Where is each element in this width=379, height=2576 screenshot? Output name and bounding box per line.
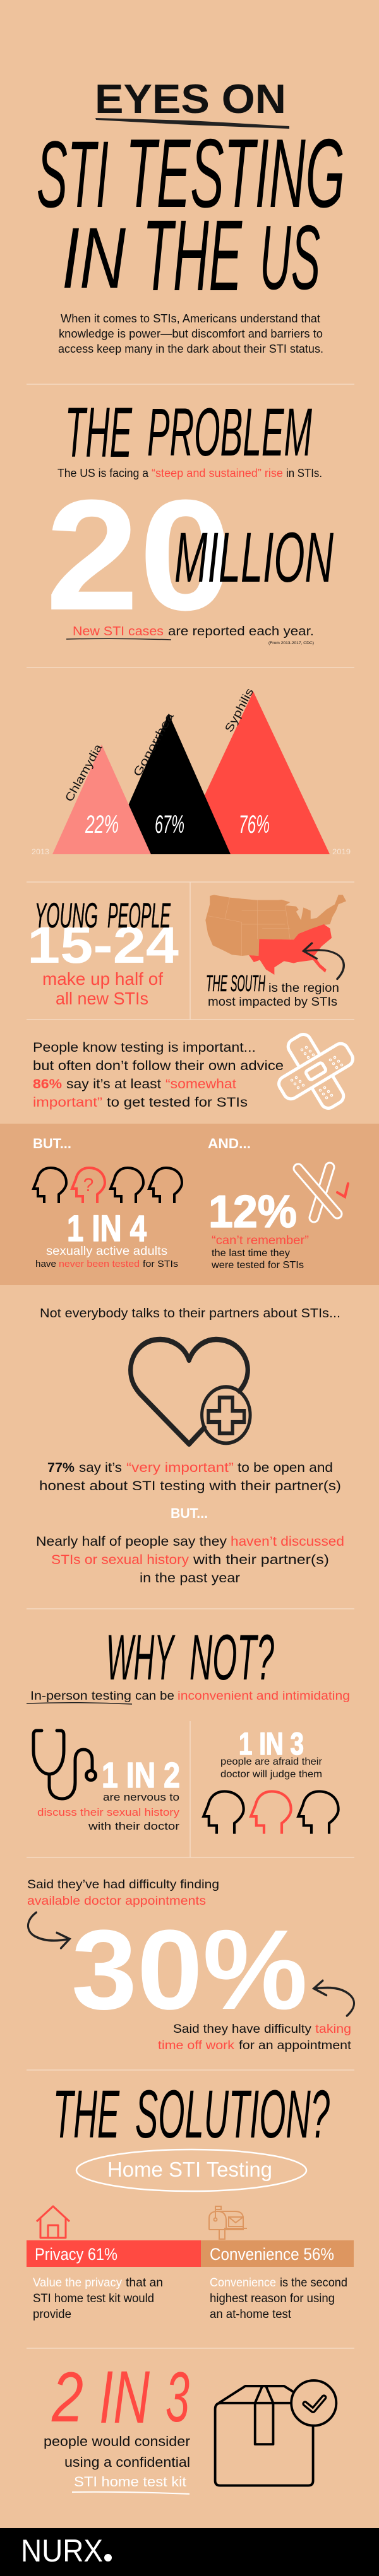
stat block: 1 in 2 <box>37 1755 180 1832</box>
text: make up half: make up half of <box>42 969 163 989</box>
stat block: 1 in 3 <box>203 1726 339 1834</box>
text: not everybody talks: Not everybody talks to their partners about STIs... <box>40 1307 340 1320</box>
label: chlamydia: Chlamydia <box>63 741 105 804</box>
stat: 12%: 12% <box>208 1187 297 1237</box>
label: and: AND... <box>208 1136 251 1151</box>
new sti cases text: (From 2013-2017, CDC) <box>268 642 314 645</box>
stat: 2 in 3: 3 <box>165 2358 190 2437</box>
label: but: BUT... <box>171 1505 208 1521</box>
big number: 20 million: 20 <box>45 467 232 643</box>
text: convenience second reason <box>210 2276 347 2321</box>
text: time off work: Said they have difficulty <box>173 2023 312 2036</box>
triangle: chlamydia <box>52 744 151 854</box>
text block: people know testing is important: People know testing is important... <box>33 1040 256 1055</box>
text: doctor appointments: available doctor appointments <box>27 1895 206 1908</box>
text: nearly half: STIs or sexual history <box>51 1553 190 1567</box>
text: convenience second reason: Convenience <box>210 2276 276 2290</box>
text: people would consider: people would consider <box>44 2433 190 2449</box>
problem subtitle: The US is facing a <box>57 467 149 479</box>
text: 77% very important <box>39 1461 341 1493</box>
text: convenience second reason: highest reason for using <box>210 2292 335 2305</box>
stat block: 1 in 2: discuss their sexual history <box>37 1806 180 1818</box>
arrow: into 30% left <box>28 1912 69 1948</box>
panel: young people: all new STIs <box>56 989 148 1008</box>
stat: 1 in 4: 1 IN 4 <box>67 1208 147 1249</box>
panel: the south <box>205 895 346 1009</box>
intro text: knowledge is power—but discomfort and barriers to <box>59 327 323 340</box>
callout: home sti testing <box>76 2150 306 2191</box>
text: can't remember: “can’t remember” <box>212 1234 309 1247</box>
text: doctor appointments: Said they’ve had difficulty finding <box>27 1878 219 1891</box>
text block: people know testing is important: important” <box>33 1095 102 1110</box>
panel: young people: PEOPLE <box>107 895 171 935</box>
stat block: 1 in 2: are nervous to <box>103 1791 179 1803</box>
text: doctor appointments <box>27 1878 219 1908</box>
text: 77% very important: say it’s <box>79 1461 122 1475</box>
problem subtitle: in STIs. <box>286 467 322 479</box>
label: syphilis: Syphilis <box>222 686 256 734</box>
text: people would consider: STI home test kit <box>74 2474 186 2490</box>
logo: nurx: NURX <box>21 2533 103 2568</box>
callout: home sti testing: Home STI Testing <box>107 2158 272 2181</box>
icon: stethoscope <box>33 1731 96 1799</box>
text block: people know testing is important: 86% <box>33 1077 62 1091</box>
text block: people know testing is important: “somewhat <box>165 1077 236 1091</box>
label: gonorrhea: Gonorrhea <box>131 710 176 779</box>
text: value the privacy: that an <box>126 2276 163 2290</box>
icon: package with check <box>215 2380 336 2486</box>
icon: house <box>37 2206 69 2238</box>
problem subtitle: “steep and sustained” rise <box>152 467 283 479</box>
panel: but and: were tested for STIs <box>211 1260 304 1271</box>
text: nearly half: in the past year <box>140 1571 240 1585</box>
bar: convenience 56% <box>201 2240 354 2267</box>
arrow to south <box>303 943 344 979</box>
icon: crossed test tubes with check <box>298 1167 348 1218</box>
text: value the privacy: Value the privacy <box>33 2276 122 2290</box>
text block: people know testing is important <box>33 1040 284 1110</box>
bar: privacy 61%: Privacy 61% <box>35 2245 117 2264</box>
panel: the south: THE <box>206 970 227 996</box>
text: 77% very important: honest about STI testing with their partner(s) <box>39 1479 341 1493</box>
intro text: access keep many in the dark about their STI status. <box>58 343 323 355</box>
title: STI <box>37 121 109 227</box>
big number: 30%: 30% <box>71 1907 308 2033</box>
text: 77% very important: to be open and <box>238 1461 333 1475</box>
text: time off work <box>158 2023 352 2052</box>
panel: but and <box>0 1124 379 1285</box>
axis label: 2019: 2019 <box>332 847 351 856</box>
stat block: 1 in 3: people are afraid their <box>220 1756 323 1767</box>
big number: 20 million <box>45 467 334 643</box>
stat block: 1 in 2: with their doctor <box>88 1820 179 1832</box>
text: 77% very important: “very important” <box>126 1461 234 1475</box>
label: but: BUT... <box>33 1136 71 1151</box>
bar: convenience 56%: Convenience 56% <box>210 2245 334 2264</box>
text: value the privacy: STI home test kit would <box>33 2292 154 2305</box>
icon: four heads, one with question mark <box>33 1168 182 1203</box>
title line: in the us: IN <box>62 210 126 307</box>
text block: people know testing is important: but often don’t follow their own advice <box>33 1059 284 1073</box>
icon: crossed bandages <box>276 1032 356 1111</box>
new sti cases text: New STI cases <box>73 625 164 638</box>
text: value the privacy: provide <box>33 2308 71 2321</box>
title: THE <box>143 199 243 312</box>
stat: 2 in 3: 2 <box>51 2358 83 2437</box>
heading: the problem <box>65 393 312 472</box>
text: in-person testing: can be <box>135 1690 174 1703</box>
text: time off work: time off work <box>158 2039 235 2052</box>
text: convenience second reason: an at-home test <box>210 2308 292 2321</box>
triangle: syphilis <box>177 691 330 854</box>
title underline brush <box>95 118 289 129</box>
stat block: 1 in 3: doctor will judge them <box>220 1769 322 1780</box>
intro text: When it comes to STIs, Americans understand that <box>61 312 320 325</box>
text: 77% very important: 77% <box>47 1461 75 1475</box>
value: 76%: 76% <box>239 811 270 838</box>
triangle: gonorrhea <box>107 714 231 854</box>
heading: the problem: THE <box>65 393 133 472</box>
heading: why not: WHY <box>106 1621 176 1693</box>
panel: the south: SOUTH <box>231 970 265 996</box>
panel: the south: most impacted by STIs <box>208 996 337 1009</box>
text: nearly half <box>36 1534 344 1585</box>
text: people would consider <box>44 2433 190 2494</box>
text block: people know testing is important: say it’s at least <box>66 1077 161 1091</box>
text: nearly half: haven’t discussed <box>231 1534 344 1549</box>
icon: three heads <box>203 1791 339 1834</box>
text: sexually active adults: sexually active adults <box>46 1245 167 1258</box>
text: in-person testing <box>27 1690 350 1704</box>
footer <box>0 2528 379 2576</box>
panel: young people <box>27 895 179 1008</box>
stat: 2 in 3 <box>51 2356 190 2439</box>
text: value the privacy <box>33 2276 163 2321</box>
value: 67%: 67% <box>155 811 184 838</box>
panel: but and: never been tested <box>59 1259 140 1269</box>
stat block: 1 in 3: 1 IN 3 <box>239 1726 304 1761</box>
title <box>37 76 345 312</box>
panel: but and: the last time they <box>212 1248 290 1259</box>
bar: privacy 61% <box>27 2240 201 2267</box>
intro text <box>58 312 323 355</box>
text: convenience second reason: is the second <box>280 2276 347 2290</box>
text: in-person testing: In-person testing <box>30 1690 131 1703</box>
panel: but and: have <box>35 1259 56 1269</box>
text: time off work: taking <box>315 2023 351 2036</box>
text: nearly half: with their partner(s) <box>193 1553 329 1567</box>
heading: the solution: THE <box>53 2076 120 2152</box>
infographic canvas: NOT? <box>190 1621 274 1693</box>
big number: 15-24: 15-24 <box>27 917 179 974</box>
chart: triangles sti rise <box>32 686 351 856</box>
panel: young people: YOUNG <box>35 895 98 935</box>
axis label: 2013: 2013 <box>32 847 49 856</box>
text: time off work: for an appointment <box>239 2039 352 2052</box>
new sti cases text <box>66 625 314 645</box>
value: 22%: 22% <box>85 811 119 838</box>
icon: four heads, one with question mark: ? <box>83 1175 93 1196</box>
arrow: into 30% right <box>314 1980 354 2016</box>
title line: eyes on: EYES ON <box>95 76 286 122</box>
map: us with south highlighted <box>205 895 346 979</box>
text: nearly half: Nearly half of people say they <box>36 1534 227 1549</box>
text block: people know testing is important: to get tested for STIs <box>107 1095 248 1110</box>
text: in-person testing: inconvenient and intimidating <box>177 1690 350 1703</box>
problem subtitle <box>57 467 322 479</box>
stat: 2 in 3: IN <box>99 2356 150 2439</box>
text: people would consider: using a confidential <box>64 2454 190 2470</box>
new sti cases text: are reported each year. <box>168 625 314 638</box>
icon: heart with plus <box>131 1339 250 1444</box>
panel: but and: for STIs <box>143 1259 178 1269</box>
panel: the south: is the region <box>268 982 339 995</box>
stat block: 1 in 2: 1 IN 2 <box>102 1755 180 1796</box>
icon: mailbox <box>209 2206 247 2239</box>
heading: the solution <box>53 2076 330 2152</box>
